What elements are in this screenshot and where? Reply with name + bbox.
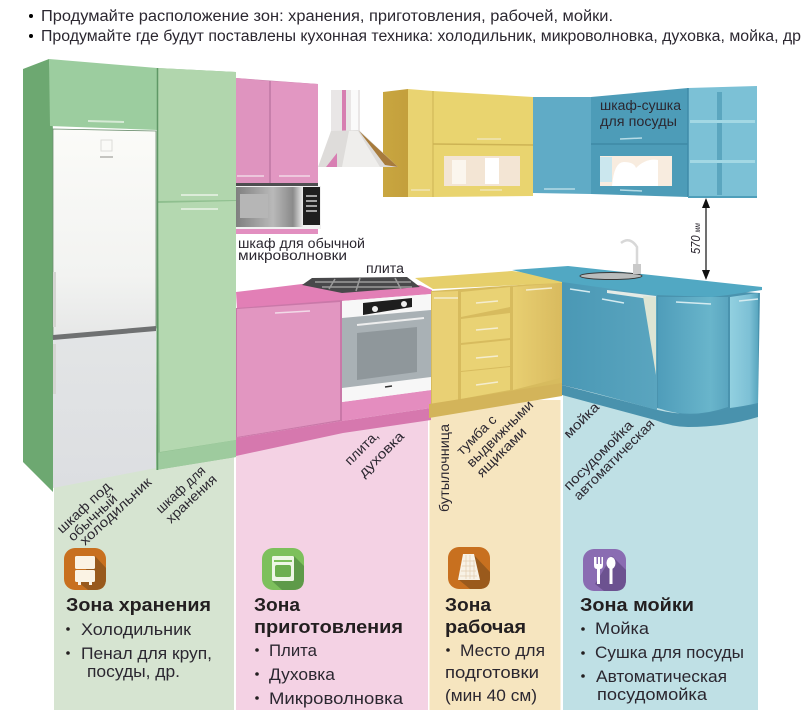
zone text: cooking: Плита	[269, 642, 318, 660]
rotated labels: cooking: плита,	[342, 428, 382, 468]
tall green storage units	[23, 59, 236, 492]
cabinet labels: шкаф-сушка	[600, 98, 682, 113]
zone text: storage: посуды, др.	[87, 663, 180, 681]
cabinet labels: для посуды	[600, 114, 677, 129]
zone text: washing: Сушка для посуды	[595, 644, 744, 662]
zone text: work: (мин 40 см)	[445, 687, 537, 705]
zone text: cooking	[254, 595, 404, 708]
zone text: cooking: Духовка	[269, 666, 336, 684]
icon: grater	[448, 547, 490, 589]
rotated labels: washing: посудомойка	[561, 417, 637, 493]
icon: fridge	[64, 548, 106, 590]
zone text: work: Зона	[445, 595, 492, 615]
cabinet labels	[238, 98, 682, 276]
rotated labels: work	[437, 397, 536, 512]
intro bullets: Продумайте расположение зон: хранения, приготовления, рабочей, мойки.	[41, 8, 613, 25]
extractor hood	[318, 90, 398, 167]
zone text: storage: Холодильник	[81, 621, 192, 639]
dimension arrow 570 mm: 570 мм	[688, 223, 703, 254]
fridge	[53, 129, 156, 488]
oven	[342, 294, 431, 402]
rotated labels: washing: автоматическая	[571, 416, 657, 503]
upper blue cabinets with drying shelf	[533, 86, 757, 198]
rotated labels: washing: мойка	[561, 399, 603, 441]
gas hob	[302, 277, 420, 293]
pink base cabinet	[236, 284, 432, 456]
rotated labels: work: ящиками	[474, 424, 529, 480]
zone text: storage: Зона хранения	[66, 595, 211, 615]
zone text: work: подготовки	[445, 664, 539, 682]
rotated labels: work: тумба с	[454, 412, 500, 458]
rotated labels: washing	[561, 399, 657, 503]
yellow base cabinets	[415, 271, 562, 418]
zone text: washing: посудомойка	[597, 686, 708, 704]
sink and faucet	[580, 240, 642, 280]
zone text: cooking: приготовления	[254, 617, 403, 637]
rotated labels: storage: шкаф под	[54, 479, 114, 536]
intro bullets: Продумайте где будут поставлены кухонная техника: холодильник, микроволновка, духовка, мойка, др	[41, 28, 801, 45]
zone text: storage	[66, 595, 212, 681]
zone text: washing: Зона мойки	[580, 595, 694, 615]
icon: stove	[262, 548, 304, 590]
rotated labels: storage: хранения	[163, 472, 220, 526]
cabinet labels: микроволновки	[238, 248, 347, 263]
blue base cabinets	[512, 266, 762, 427]
zone text: washing: Мойка	[595, 620, 650, 638]
zone text: work: рабочая	[445, 617, 526, 637]
rotated labels: cooking	[342, 428, 408, 480]
zone text: cooking: Зона	[254, 595, 301, 615]
dimension arrow 570 mm	[688, 198, 710, 280]
upper yellow cabinets	[383, 89, 533, 197]
upper pink cabinets	[236, 78, 318, 186]
rotated labels: work: выдвижными	[464, 397, 536, 470]
zone text: work	[445, 595, 545, 705]
microwave	[236, 186, 321, 234]
rotated labels: work: бутылочница	[437, 423, 452, 512]
intro bullets	[29, 8, 801, 45]
icon: cutlery	[583, 549, 626, 591]
zone text: cooking: Микроволновка	[269, 690, 404, 708]
rotated labels: storage: обычный	[65, 491, 120, 544]
zone text: washing	[580, 595, 744, 704]
cabinet labels: шкаф для обычной	[238, 236, 365, 251]
rotated labels: storage	[54, 463, 220, 548]
zone text: storage: Пенал для круп,	[81, 645, 212, 663]
zone text: washing: Автоматическая	[596, 668, 727, 686]
rotated labels: storage: холодильник	[77, 474, 154, 548]
cabinet labels: плита	[366, 261, 405, 276]
zone text: work: Место для	[460, 642, 545, 660]
zone backgrounds	[54, 390, 758, 710]
rotated labels: storage: шкаф для	[153, 463, 208, 516]
rotated labels: cooking: духовка	[356, 428, 408, 480]
